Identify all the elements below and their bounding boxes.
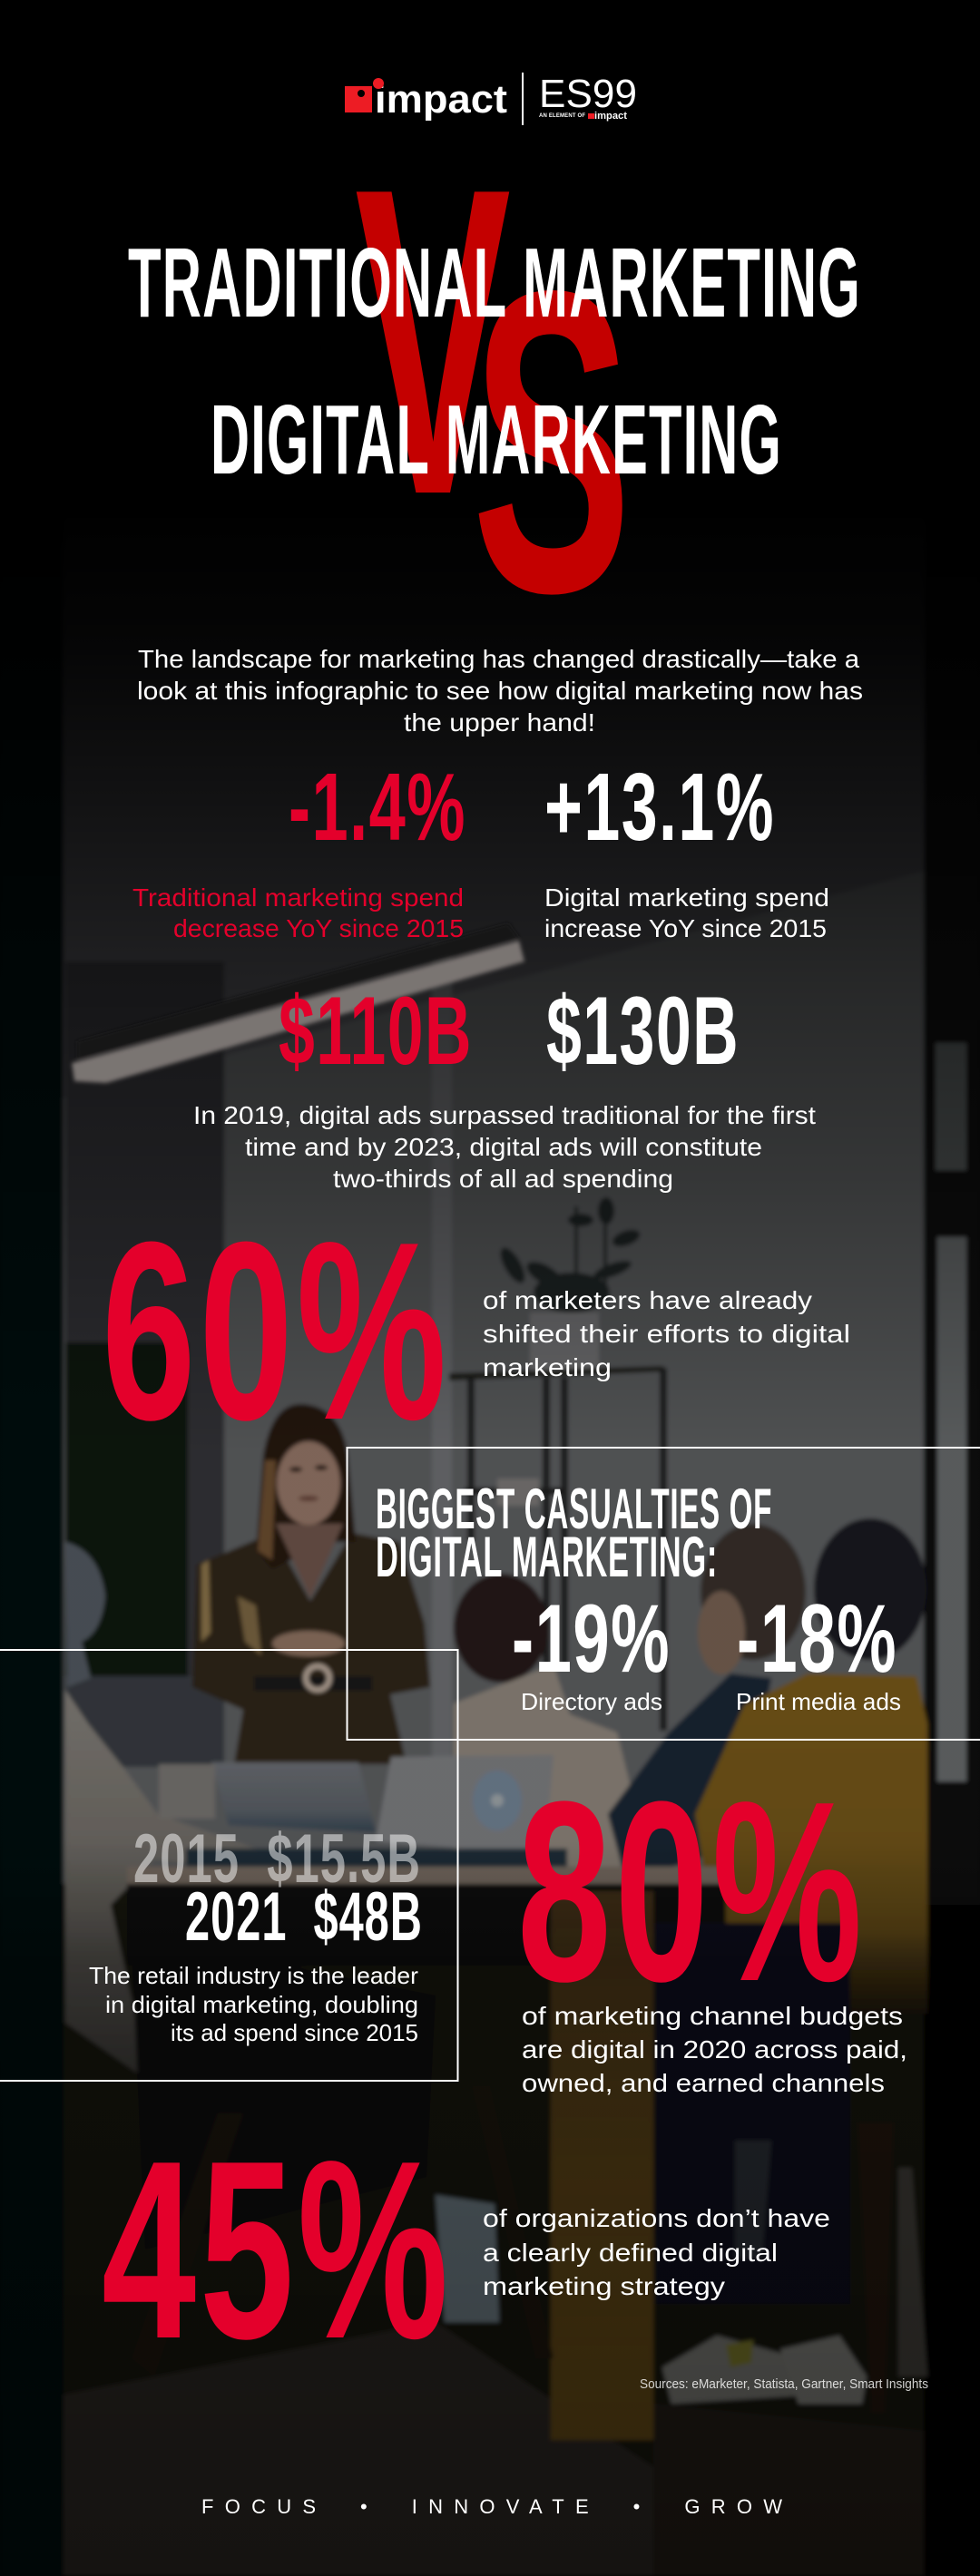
stat: traditional spend -1.4%: Traditional marketing spend [132, 883, 464, 912]
lower room [0, 1814, 980, 2576]
window frames on the right [924, 544, 980, 1959]
text: 80% description: of marketing channel budgets [522, 2002, 903, 2030]
text: 45% description [483, 2204, 830, 2300]
icon: impact red square [345, 86, 372, 112]
wooden table column [551, 1891, 653, 2440]
text: digital ads surpassed traditional: In 2019, digital ads surpassed traditional for the first [193, 1101, 816, 1129]
text: 45% description: a clearly defined digital [483, 2239, 778, 2267]
sources: Sources: eMarketer, Statista, Gartner, Smart Insights [640, 2376, 928, 2392]
text: 60% description: shifted their efforts to digital [483, 1320, 850, 1348]
stat: 2015 $15.5B: 2015 $15.5B [133, 1820, 421, 1898]
text: 80% description [522, 2002, 907, 2097]
stat: 2021 $48B: 2021 $48B [185, 1878, 423, 1956]
stat: traditional spend -1.4% [132, 754, 466, 942]
text: retail description: The retail industry is the leader [89, 1962, 418, 1989]
panel heading [376, 1478, 772, 1589]
intro text [137, 645, 863, 737]
panel: biggest casualties [347, 1448, 980, 1740]
stat: 60%: 60% [102, 1190, 450, 1473]
ceiling light fixture [72, 923, 524, 1083]
big red VS: V [355, 98, 512, 586]
panel: retail industry [0, 1650, 457, 2081]
stat: digital spend +13.1%: +13.1% [544, 754, 775, 861]
icon: small impact square [588, 113, 594, 119]
stat: directory ads -19%: Directory ads [521, 1688, 662, 1715]
logo divider [522, 73, 524, 125]
text: 60% description [483, 1286, 850, 1381]
impact wordmark: impact [375, 77, 507, 122]
stat: digital spend +13.1% [544, 754, 829, 942]
text: 45% description: of organizations don’t have [483, 2204, 830, 2232]
logo [345, 72, 637, 125]
table [127, 1849, 726, 1966]
text: digital ads surpassed traditional: two-thirds of all ad spending [333, 1165, 673, 1193]
text: 80% description: are digital in 2020 across paid, [522, 2035, 907, 2064]
stat: traditional spend -1.4%: -1.4% [289, 754, 466, 861]
left person [65, 1542, 261, 2082]
text: retail description: in digital marketing, doubling [105, 1991, 418, 2018]
text: 60% description: marketing [483, 1353, 612, 1381]
person in mustard sweater [695, 1518, 927, 2014]
stat: digital spend +13.1%: Digital marketing spend [544, 883, 829, 912]
shelf with plant [449, 1197, 667, 1731]
stat: $130B digital: $130B [546, 976, 740, 1085]
tagline: an element of impact: AN ELEMENT OF [539, 113, 585, 119]
stat: print media ads -18% [736, 1584, 901, 1715]
stat: directory ads -19% [512, 1584, 671, 1715]
man with beige shirt [454, 1574, 631, 1869]
ES99 wordmark: ES99 [539, 72, 637, 116]
intro text: look at this infographic to see how digital marketing now has [137, 677, 863, 705]
stat: $110B traditional: $110B [279, 976, 473, 1085]
stat: directory ads -19%: -19% [512, 1584, 671, 1693]
big red VS: S [472, 202, 632, 682]
text: retail description [89, 1962, 418, 2046]
text: digital ads surpassed traditional [193, 1101, 816, 1193]
stat: print media ads -18%: -18% [737, 1584, 897, 1693]
stat: digital spend +13.1%: increase YoY since 2015 [544, 914, 827, 942]
text: retail description: its ad spend since 2015 [171, 2019, 418, 2046]
icon: wordmark red dot [373, 78, 384, 89]
small impact wordmark: impact [594, 111, 627, 122]
man with navy shirt [608, 1524, 806, 1882]
text: digital ads surpassed traditional: time and by 2023, digital ads will constitute [245, 1133, 762, 1161]
intro text: The landscape for marketing has changed drastically—take a [138, 645, 859, 673]
legs and shoes [132, 1923, 927, 2413]
stat: 45%: 45% [102, 2109, 452, 2392]
footer tagline: FOCUS • INNOVATE • GROW [201, 2495, 782, 2518]
text: 45% description: marketing strategy [483, 2272, 725, 2300]
stat: print media ads -18%: Print media ads [736, 1688, 901, 1715]
text: 60% description: of marketers have already [483, 1286, 812, 1314]
text: 80% description: owned, and earned channels [522, 2069, 885, 2097]
laptops [159, 1755, 554, 1855]
woman presenting [192, 1404, 430, 1764]
intro text: the upper hand! [404, 708, 595, 737]
stat: traditional spend -1.4%: decrease YoY since 2015 [173, 914, 464, 942]
title [128, 228, 861, 495]
